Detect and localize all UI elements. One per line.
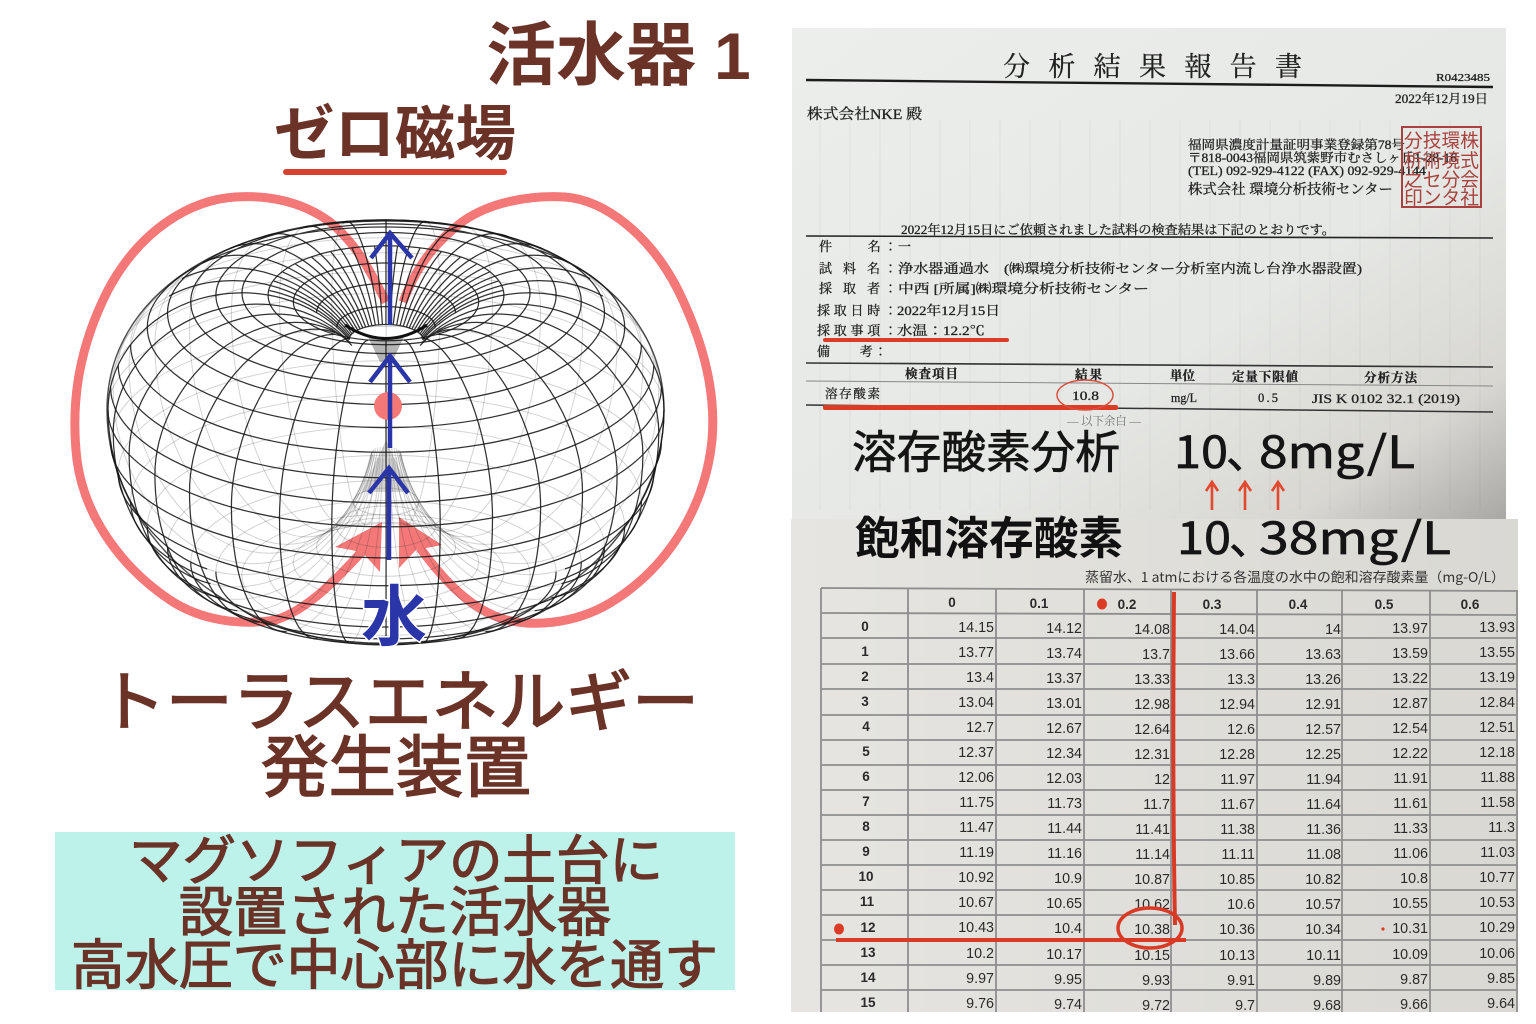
table values: 12.03: [1046, 771, 1082, 787]
table values: 13.4: [966, 670, 994, 686]
table values: 13.55: [1479, 645, 1515, 661]
saturated oxygen value: 10: [1177, 503, 1231, 567]
row headers: 7: [862, 794, 870, 809]
table values: 10.43: [958, 920, 994, 936]
results table: 溶存酸素: [825, 386, 880, 401]
report title: 分析結果報告書: [1003, 52, 1302, 82]
column headers: 0: [948, 595, 956, 610]
table values: 13.3: [1227, 672, 1255, 688]
center zero point dot: [374, 392, 402, 420]
sample details: 一: [898, 239, 911, 254]
row headers: 9: [862, 844, 870, 859]
table values: 10.9: [1054, 871, 1082, 887]
table values: 13.97: [1392, 621, 1428, 637]
results table: 0.5: [1258, 391, 1278, 405]
sample details: 浄水器通過水 (㈱環境分析技術センター分析室内流し台浄水器設置): [898, 261, 1362, 276]
panel: analysis report: [792, 28, 1506, 520]
table values: 14.15: [958, 620, 994, 636]
table values: 10.34: [1305, 922, 1341, 938]
table values: 9.87: [1400, 972, 1428, 988]
red lookup lines and circle on 10.38: [836, 592, 1186, 948]
wireframe back surface and see-through lines: [108, 238, 664, 635]
table values: 10.55: [1392, 896, 1428, 912]
table values: 14: [1325, 622, 1341, 638]
issuer address: [1188, 137, 1457, 198]
table values: 10.2: [966, 946, 994, 962]
wireframe rings, upper back: [147, 220, 625, 340]
table values: 9.93: [1142, 973, 1170, 989]
saturated oxygen value: [855, 502, 1451, 567]
results table: 分析方法: [1364, 370, 1418, 385]
table values: 12.87: [1392, 696, 1428, 712]
torus diagram: [75, 176, 713, 691]
red seal: [1402, 126, 1481, 210]
table values: 11.47: [959, 820, 994, 836]
table values: 10.36: [1219, 922, 1255, 938]
table values: 12.91: [1305, 697, 1341, 713]
panel: saturated dissolved oxygen table: [791, 502, 1518, 1014]
table values: 13.66: [1219, 647, 1255, 663]
table values: 11.88: [1480, 770, 1515, 786]
table values: 10.38: [1134, 922, 1170, 938]
results table: 10.8: [1072, 389, 1099, 403]
results table: 単位: [1170, 368, 1195, 383]
table values: 12.51: [1479, 720, 1515, 736]
table values: 9.7: [1235, 998, 1255, 1014]
callout box: [55, 819, 735, 1000]
table values: 11.38: [1220, 822, 1255, 838]
red underline and circle: dissolved oxygen result: [823, 380, 1118, 410]
table values: 12.6: [1227, 722, 1255, 738]
table values: 10.29: [1479, 920, 1515, 936]
table values: 10.67: [958, 895, 994, 911]
row headers: 12: [860, 920, 876, 935]
table values: 12: [1154, 772, 1170, 788]
row headers: 1: [861, 644, 869, 659]
table values: 11.7: [1143, 797, 1170, 813]
table values: 13.59: [1392, 646, 1428, 662]
table values: 10.87: [1134, 872, 1170, 888]
report number and date: 2022年12月19日: [1395, 91, 1488, 106]
red seal: 分技環株: [1404, 126, 1479, 153]
row headers: 5: [862, 744, 870, 759]
table values: 9.74: [1054, 997, 1082, 1013]
pink magnetic field loops: [75, 197, 713, 623]
blue arrows: [369, 233, 412, 560]
row headers: 4: [862, 719, 870, 734]
table values: 10.13: [1219, 948, 1255, 964]
table values: 12.84: [1479, 695, 1515, 711]
row headers: 6: [862, 769, 870, 784]
dissolved oxygen analysis value: 8mg/L: [1259, 417, 1415, 481]
sample details: 水温：12.2℃: [897, 323, 985, 338]
row headers: 2: [861, 669, 869, 684]
title: 1: [714, 19, 751, 93]
table values: 10.4: [1054, 921, 1082, 937]
table values: 10.77: [1479, 870, 1515, 886]
row headers: 8: [862, 819, 870, 834]
table values: 9.95: [1054, 972, 1082, 988]
sample details: 採 取 者：: [819, 281, 897, 296]
table values: 10.82: [1305, 872, 1341, 888]
table values: 13.93: [1479, 620, 1515, 636]
callout box: 設置された活水器: [179, 868, 611, 947]
table values: 13.26: [1305, 672, 1341, 688]
table values: 12.22: [1392, 746, 1428, 762]
table values: 11.33: [1393, 821, 1428, 837]
red markers on table: [834, 598, 1385, 934]
column headers: 0.3: [1203, 597, 1222, 612]
dissolved oxygen analysis value: 10: [1174, 417, 1228, 481]
callout box: マグソフィアの土台に: [129, 819, 663, 895]
table values: 14.04: [1219, 622, 1255, 638]
heading: zero magnetic field: ゼロ磁場: [274, 86, 516, 173]
table grid: [821, 588, 1517, 1012]
table values: 11.03: [1480, 845, 1515, 861]
table values: 10.62: [1134, 897, 1170, 913]
table values: 11.3: [1488, 820, 1515, 836]
torus silhouette and hole lip: [107, 220, 664, 645]
table values: 14.12: [1046, 621, 1082, 637]
results table: [806, 363, 1493, 412]
red seal: 印ンタ社: [1404, 183, 1479, 210]
wireframe meridians, back half: [113, 176, 659, 574]
table values: 13.33: [1134, 672, 1170, 688]
table values: 13.7: [1142, 647, 1170, 663]
table values: 10.8: [1400, 871, 1428, 887]
table values: 13.22: [1392, 671, 1428, 687]
row headers: 15: [860, 995, 876, 1010]
table values: 13.01: [1046, 696, 1082, 712]
table values: 9.68: [1313, 998, 1341, 1014]
table values: 9.72: [1142, 998, 1170, 1014]
table values: 10.15: [1134, 948, 1170, 964]
wireframe meridians, front half: [108, 293, 664, 691]
column headers: 0.4: [1289, 597, 1308, 612]
table values: 10.53: [1479, 895, 1515, 911]
row headers: 14: [860, 970, 876, 985]
sample details: 件 名：: [819, 239, 897, 254]
wireframe funnel fan lines: [269, 246, 503, 338]
table values: 13.04: [958, 695, 994, 711]
table values: 12.67: [1046, 721, 1082, 737]
table caption: 蒸留水、1 atmにおける各温度の水中の飽和溶存酸素量（mg-O/L）: [1085, 566, 1505, 586]
table values: 12.94: [1219, 697, 1255, 713]
issuer address: 福岡県濃度計量証明事業登録第78号: [1188, 137, 1405, 152]
table values: 13.77: [958, 645, 994, 661]
results table: JIS K 0102 32.1 (2019): [1312, 392, 1460, 406]
table values: 12.57: [1305, 722, 1341, 738]
sample details: 備 考：: [817, 344, 887, 359]
sample details: 採取日時：: [817, 303, 897, 318]
table values: 11.06: [1393, 846, 1428, 862]
table values: 13.37: [1046, 671, 1082, 687]
table values: 12.25: [1305, 747, 1341, 763]
dissolved oxygen analysis value: 、: [1226, 417, 1270, 481]
addressee: 株式会社NKE 殿: [807, 106, 923, 123]
red arrows: [1206, 482, 1284, 510]
title: 活水器: [486, 0, 696, 99]
table values: 12.18: [1479, 745, 1515, 761]
row headers: [858, 619, 876, 1010]
table values: 13.74: [1046, 646, 1082, 662]
table values: 10.06: [1479, 946, 1515, 962]
table values: 11.44: [1047, 821, 1082, 837]
results table: 定量下限値: [1232, 369, 1298, 384]
table values: 11.73: [1047, 796, 1082, 812]
table values: 11.94: [1306, 772, 1341, 788]
table values: 10.09: [1392, 947, 1428, 963]
table values: 11.08: [1306, 847, 1341, 863]
table values: 14.08: [1134, 622, 1170, 638]
column headers: 0.2: [1118, 597, 1136, 612]
table values: 10.92: [958, 870, 994, 886]
table values: 12.28: [1219, 747, 1255, 763]
red underline: water temperature: [823, 338, 1009, 342]
table values: 9.85: [1487, 971, 1515, 987]
results table: 結果: [1075, 367, 1102, 382]
table values: 10.11: [1306, 948, 1341, 964]
table values: 11.11: [1221, 847, 1255, 863]
row headers: 0: [861, 619, 869, 634]
table values: 9.64: [1487, 996, 1515, 1012]
red seal: 析術境式: [1404, 146, 1479, 173]
table values: 12.98: [1134, 697, 1170, 713]
column headers: [948, 595, 1480, 612]
end of table note: — 以下余白 —: [1066, 414, 1142, 428]
table values: 11.97: [1220, 772, 1255, 788]
show-through table lines: [820, 120, 1480, 510]
table values: 11.64: [1306, 797, 1341, 813]
issuer address: 株式会社 環境分析技術センター: [1188, 181, 1393, 198]
table values: 12.34: [1046, 746, 1082, 762]
table values: 12.54: [1392, 721, 1428, 737]
column headers: 0.1: [1030, 596, 1049, 611]
table values: 11.91: [1393, 771, 1428, 787]
sample details: [817, 239, 1362, 359]
report number and date: [1395, 72, 1491, 106]
row headers: 10: [858, 869, 874, 884]
table values: 9.97: [966, 971, 994, 987]
table values: 11.58: [1480, 795, 1515, 811]
saturated oxygen value: 38mg/L: [1259, 503, 1451, 567]
heading: torus energy device: トーラスエネルギー: [99, 649, 699, 745]
intro sentence: 2022年12月15日にご依頼されました試料の検査結果は下記のとおりです。: [901, 222, 1335, 237]
table values: 12.37: [958, 745, 994, 761]
table values: 11.16: [1047, 846, 1082, 862]
table values: 10.31: [1392, 921, 1428, 937]
table values: 9.66: [1400, 997, 1428, 1013]
heading: torus energy device: 発生装置: [261, 714, 531, 811]
table values: 9.89: [1313, 973, 1341, 989]
row headers: 11: [860, 894, 875, 909]
saturated oxygen value: 、: [1229, 503, 1273, 567]
table values: 10.6: [1227, 897, 1255, 913]
column headers: 0.5: [1375, 597, 1394, 612]
sample details: 中西 [所属]㈱環境分析技術センター: [898, 281, 1149, 296]
table values: 11.19: [959, 845, 994, 861]
table values: 11.75: [959, 795, 994, 811]
saturated oxygen value: 飽和溶存酸素: [855, 502, 1123, 567]
report number and date: R0423485: [1436, 72, 1491, 84]
table values: 11.36: [1306, 822, 1341, 838]
table values: 12.06: [958, 770, 994, 786]
table values: 11.61: [1393, 796, 1428, 812]
water character: 水: [361, 564, 427, 660]
table values: 11.14: [1135, 847, 1170, 863]
table values: 11.67: [1220, 797, 1255, 813]
table values: 9.91: [1227, 973, 1255, 989]
column headers: 0.6: [1461, 597, 1480, 612]
dissolved oxygen analysis value: [852, 416, 1415, 481]
callout box: 高水圧で中心部に水を通す: [71, 921, 718, 1000]
table values: [958, 620, 1515, 1014]
table values: 13.19: [1479, 670, 1515, 686]
sample details: 試 料 名：: [819, 261, 897, 276]
wireframe rings, front: [108, 293, 664, 644]
heading: torus energy device: [99, 649, 699, 811]
table values: 10.85: [1219, 872, 1255, 888]
table values: 10.65: [1046, 896, 1082, 912]
table values: 12.64: [1134, 722, 1170, 738]
table values: 11.41: [1135, 822, 1170, 838]
table values: 9.76: [966, 996, 994, 1012]
table values: 10.57: [1305, 897, 1341, 913]
results table: mg/L: [1171, 391, 1197, 405]
row headers: 13: [860, 945, 876, 960]
red seal: 之セ分会: [1404, 165, 1479, 192]
dissolved oxygen analysis value: 溶存酸素分析: [852, 416, 1120, 481]
issuer address: (TEL) 092-929-4122 (FAX) 092-929-4144: [1188, 164, 1427, 178]
results table: 検査項目: [905, 366, 958, 381]
table values: 13.63: [1305, 647, 1341, 663]
sample details: 採取事項：: [817, 323, 897, 338]
sample details: 2022年12月15日: [897, 303, 1000, 318]
table values: 12.7: [966, 720, 994, 736]
issuer address: 〒818-0043福岡県筑紫野市むさしヶ丘1-28-16: [1188, 150, 1457, 165]
table values: 10.17: [1046, 947, 1082, 963]
row headers: 3: [861, 694, 869, 709]
table values: 12.31: [1134, 747, 1170, 763]
